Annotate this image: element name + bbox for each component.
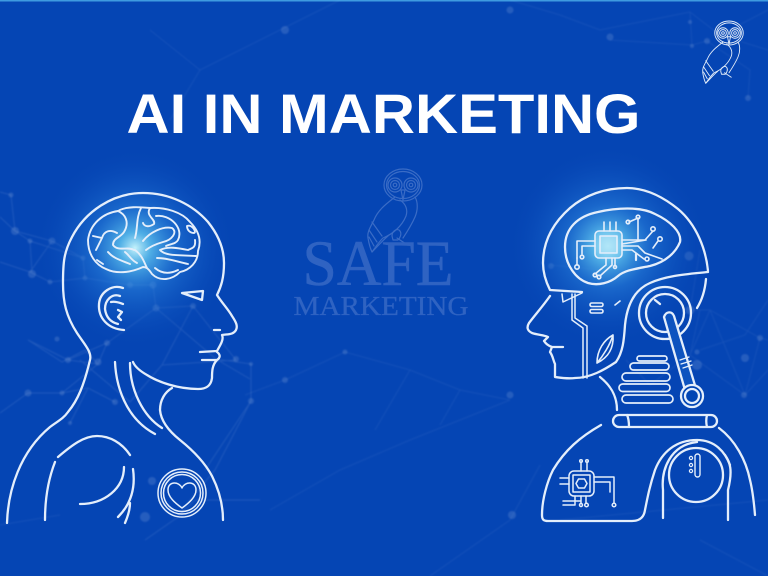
icon: watermark owl <box>368 169 422 252</box>
face details <box>590 301 620 363</box>
head and shoulder outline <box>7 193 237 523</box>
ear dial <box>639 287 691 339</box>
icon: heart badge <box>158 469 206 517</box>
rod end joint <box>681 385 703 407</box>
neck rear <box>600 377 617 410</box>
ear <box>99 287 124 330</box>
face profile and jaw <box>528 272 708 378</box>
chest lines <box>45 436 134 523</box>
icon: circuit chip in brain <box>575 215 662 279</box>
brain outline and folds <box>88 207 200 279</box>
collar <box>613 415 717 427</box>
nose detail <box>214 329 220 331</box>
dial rod <box>664 312 697 397</box>
watermark: Safe Marketing logo <box>294 169 468 321</box>
shoulder round panel <box>669 448 723 502</box>
watermark text: MARKETING: MARKETING <box>294 291 468 321</box>
human figure <box>7 193 237 523</box>
helmet inner brain outline <box>565 208 680 284</box>
torso outline <box>542 425 755 521</box>
helmet outline <box>543 188 708 292</box>
icon: small chip on chest <box>560 460 616 507</box>
title: AI IN MARKETING <box>126 82 640 145</box>
neck stripes <box>619 356 673 403</box>
watermark text: SAFE: SAFE <box>302 228 454 300</box>
brow <box>562 293 587 378</box>
icon: owl logo top right <box>703 21 743 83</box>
shoulder indicators <box>695 454 700 477</box>
eye <box>182 291 203 300</box>
robot figure <box>528 188 755 521</box>
helmet rear arc <box>697 279 706 308</box>
glow: robot brain <box>508 146 708 346</box>
neck lines <box>115 362 162 434</box>
glow: human brain <box>35 148 235 348</box>
neck front and chest line <box>160 388 223 520</box>
